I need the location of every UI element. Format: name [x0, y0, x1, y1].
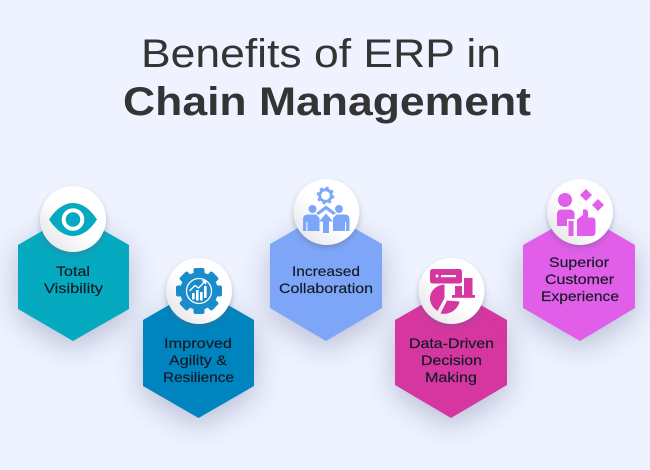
- icon: team with gear and arrow: [303, 188, 350, 233]
- title: [123, 32, 531, 124]
- label: superior customer experience: Superior: [549, 254, 609, 270]
- panel: improved agility and resilience: [143, 258, 254, 426]
- panel: increased collaboration: [270, 179, 382, 349]
- label: superior customer experience: Customer: [545, 271, 614, 287]
- label: improved agility and resilience: Agility &: [169, 352, 228, 368]
- icon: chart and pie: [430, 269, 475, 314]
- panel: total visibility: [18, 186, 129, 349]
- label: data-driven decision making: Making: [425, 369, 477, 385]
- label: data-driven decision making: [409, 335, 494, 385]
- label: increased collaboration: Increased: [292, 263, 360, 279]
- label: improved agility and resilience: Improved: [164, 335, 232, 351]
- label: data-driven decision making: Data-Driven: [409, 335, 494, 351]
- label: increased collaboration: Collaboration: [279, 280, 373, 296]
- icon: eye: [49, 203, 97, 236]
- title: Benefits of ERP in: [141, 32, 501, 76]
- title: Chain Management: [123, 80, 531, 124]
- label: improved agility and resilience: [163, 335, 234, 385]
- icon: customer and thumbs up: [557, 189, 604, 236]
- label: superior customer experience: Experience: [541, 288, 619, 304]
- icon: gear with chart: [176, 268, 222, 314]
- label: total visibility: Visibility: [44, 280, 103, 296]
- label: data-driven decision making: Decision: [421, 352, 482, 368]
- panel: superior customer experience: [523, 179, 635, 349]
- label: total visibility: Total: [56, 263, 90, 279]
- label: improved agility and resilience: Resilience: [163, 369, 234, 385]
- panel: data-driven decision making: [395, 258, 507, 426]
- label: increased collaboration: [279, 263, 373, 296]
- label: superior customer experience: [541, 254, 619, 304]
- label: total visibility: [44, 263, 103, 296]
